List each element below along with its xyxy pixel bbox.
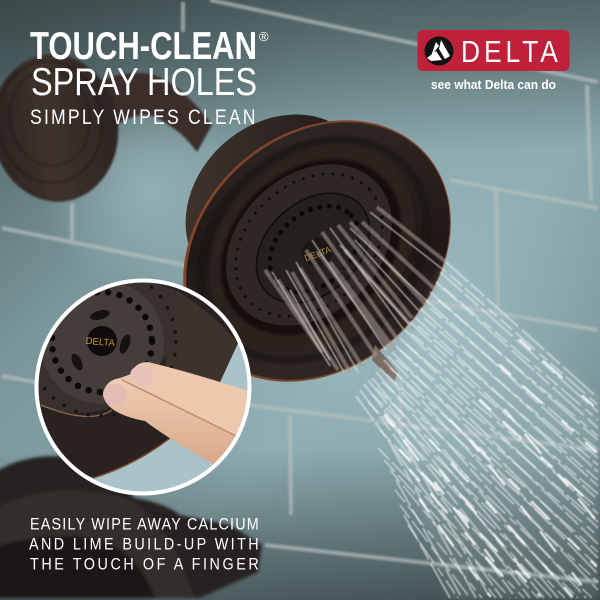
spray face [194,131,424,359]
Delta logo: DELTA [461,35,559,70]
wall flange and shower arm [0,46,212,210]
tagline: see what Delta can do [431,78,556,92]
registered mark: ® [259,29,269,44]
inset circle: finger wiping spray face [28,268,255,495]
water spray [265,207,598,598]
title: SPRAY HOLES [31,61,257,104]
lever stub [372,345,398,382]
shower head: DELTA [303,244,332,263]
shower head [130,66,504,436]
head back bell [149,77,407,333]
fingernails [130,366,154,386]
caption: EASILY WIPE AWAY CALCIUM [30,516,259,534]
Delta logo [418,30,570,92]
fingers [103,378,240,464]
caption: AND LIME BUILD-UP WITH [29,536,259,554]
inset center slots [90,310,110,320]
streams over the head [265,207,446,372]
title: TOUCH-CLEAN [30,25,257,68]
title [30,25,269,129]
logo badge [302,238,332,266]
inset circle: finger wiping spray face: DELTA [85,336,116,349]
caption [29,516,259,574]
valve trim bottom left [0,456,262,598]
caption: THE TOUCH OF A FINGER [30,556,259,574]
streams over the tile [356,262,598,598]
logo icon [424,36,454,66]
inset head [30,280,238,478]
title: SIMPLY WIPES CLEAN [30,105,255,129]
inset logo badge [87,326,117,356]
inset spray face [38,282,175,413]
soft mist fan [380,260,598,598]
head rim [130,66,504,436]
